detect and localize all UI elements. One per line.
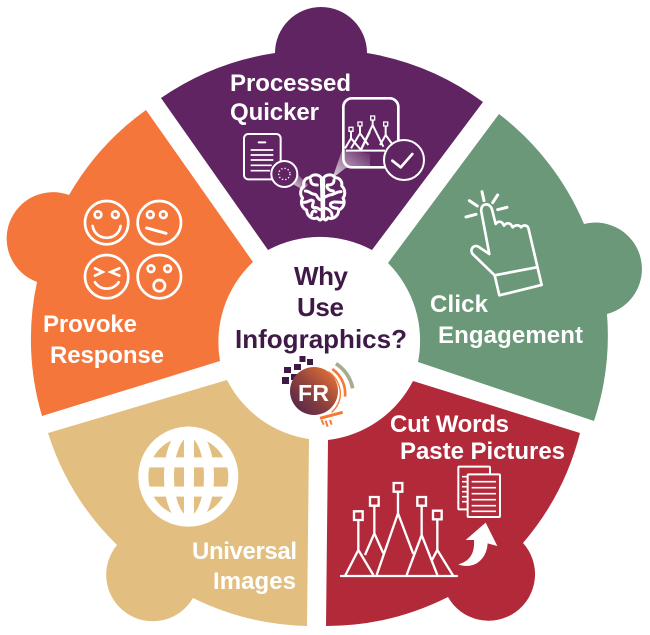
center title: Why [294,261,349,291]
icon: peak chart [341,483,457,576]
icon: neutral face [138,201,181,244]
panel: provoke response [7,110,253,416]
center title: Infographics? [235,324,407,354]
heading: universal images [192,538,297,595]
icon: globe [143,432,233,522]
panel: click engagement [388,114,642,421]
panel: processed quicker [161,7,483,250]
icon: brain [301,175,345,220]
heading: processed quicker: Quicker [230,99,319,126]
red segment [326,381,580,626]
heading: click engagement [430,291,583,349]
logo disc [290,367,338,415]
panel: cut words paste pictures [326,381,580,626]
heading: provoke response: Provoke [43,311,137,338]
heading: cut words paste pictures: Paste Pictures [400,438,565,465]
icon: clicking hand [466,192,542,295]
heading: provoke response: Response [50,342,164,369]
heading: universal images: Universal [192,538,297,565]
purple segment [161,7,483,250]
icon: smiling face [85,201,128,244]
icon: surprised face [138,255,181,298]
tan segment [48,380,309,626]
heading: click engagement: Click [430,291,489,318]
heading: cut words paste pictures: Cut Words [390,411,509,438]
center title [235,261,407,354]
heading: processed quicker [230,70,351,126]
orange segment [7,110,253,416]
heading: universal images: Images [213,568,296,595]
heading: provoke response [43,311,164,369]
icon: documents [458,467,500,517]
logo pixel squares [282,356,313,384]
green segment [388,114,642,421]
panel: universal images [48,380,309,626]
logo: FR [282,356,353,427]
logo outer arcs [320,364,353,427]
icon: chart with check mark [332,98,424,180]
heading: click engagement: Engagement [438,322,583,349]
logo letters: FR [298,380,329,406]
heading: cut words paste pictures [390,411,565,465]
heading: processed quicker: Processed [230,70,351,97]
icon: laughing face [85,255,128,298]
icon: document with loading dial [244,134,308,190]
center title: Use [297,292,344,322]
icon: curved arrow [458,523,497,566]
